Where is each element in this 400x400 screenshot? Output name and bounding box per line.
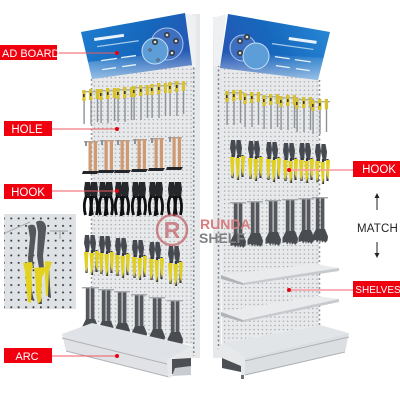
yellow plier row, right unit — [230, 140, 330, 184]
upper shelf — [221, 264, 339, 285]
label: ARC: ARC — [15, 351, 39, 363]
watermark text: SHELF — [199, 230, 245, 246]
screwdriver row, left unit — [82, 81, 187, 124]
arrow: up — [374, 193, 380, 210]
black plier row, left unit — [84, 182, 182, 216]
watermark text: RUNDA — [200, 216, 251, 232]
right unit advertising board — [213, 14, 330, 80]
screwdriver row, right unit — [225, 90, 330, 134]
label: HOOK right — [287, 161, 400, 177]
label: AD BOARD — [0, 45, 119, 60]
hammer row, left unit — [82, 137, 183, 174]
left shelf unit — [62, 13, 200, 378]
inset: hook detail — [4, 214, 76, 309]
right unit side post — [213, 17, 320, 358]
match text: MATCH — [357, 223, 398, 235]
watermark logo: R — [164, 217, 181, 243]
label: HOOK left: HOOK — [11, 187, 45, 199]
watermark logo — [157, 215, 187, 245]
lower shelf — [221, 296, 339, 322]
wrench row, right unit — [230, 197, 328, 248]
arrow: down — [374, 242, 380, 258]
right unit base — [213, 325, 349, 379]
label: HOOK left — [4, 184, 119, 199]
label: HOLE — [4, 121, 119, 136]
right shelf unit — [213, 14, 349, 379]
label: HOOK right: HOOK — [362, 164, 396, 176]
label: HOLE: HOLE — [11, 124, 43, 136]
label: SHELVES — [287, 281, 400, 297]
left unit base — [62, 323, 192, 378]
label: SHELVES: SHELVES — [355, 285, 400, 296]
label: ARC — [4, 348, 119, 363]
yellow plier row, left unit — [84, 235, 183, 286]
label: AD BOARD: AD BOARD — [2, 48, 60, 60]
left unit advertising board — [81, 13, 196, 79]
right unit pegboard — [220, 68, 319, 343]
wrench row, left unit — [82, 287, 183, 346]
left unit pegboard — [92, 64, 192, 345]
left unit side post — [92, 14, 200, 358]
watermark text — [199, 216, 251, 246]
